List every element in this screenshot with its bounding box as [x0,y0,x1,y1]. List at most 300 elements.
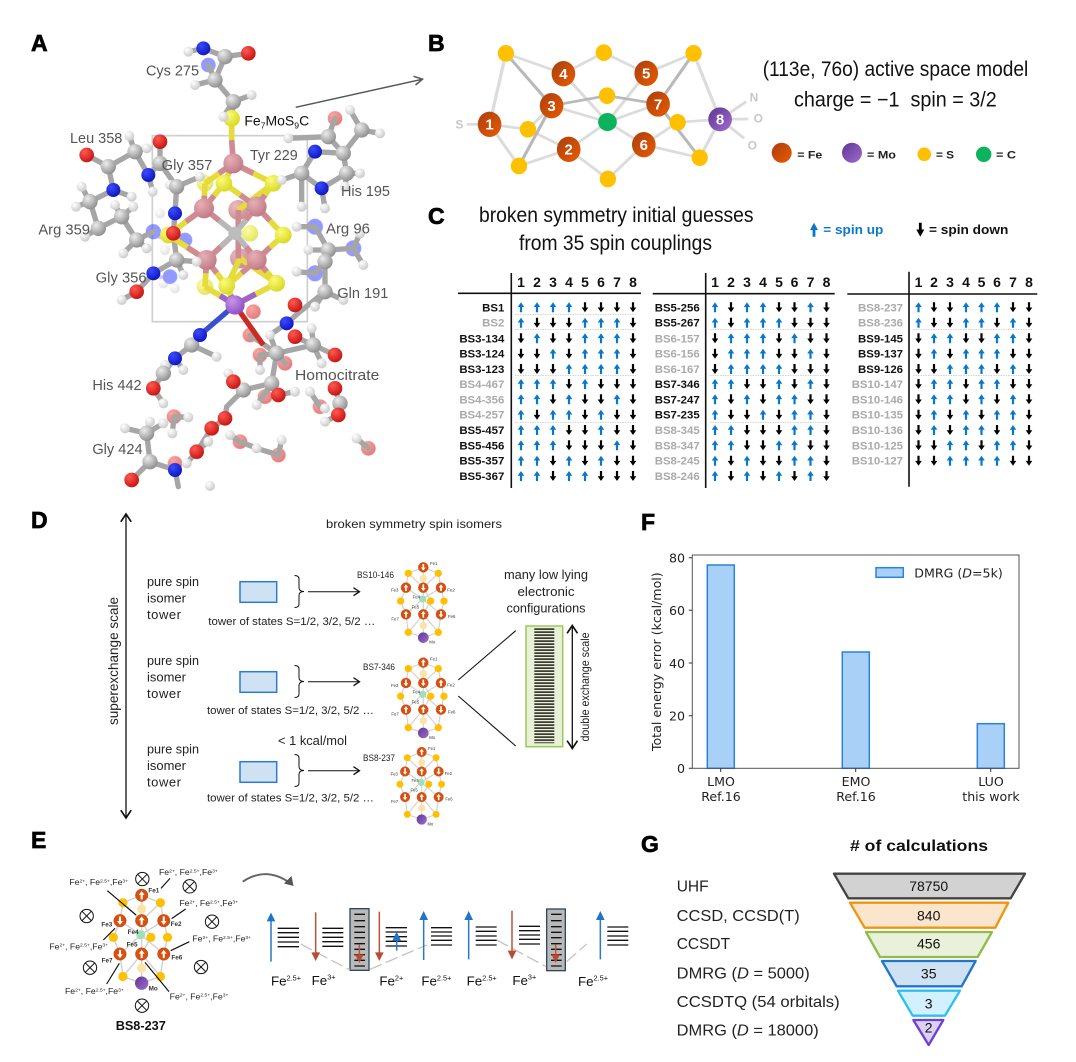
row BS6-157 [655,333,830,345]
cluster BS7-346: Fe1 [430,656,438,661]
cluster BS10-146: Fe2 [447,587,455,592]
tower row 3: tower [147,775,182,790]
row BS4-257 [459,410,636,422]
iron oxidation labels: 2.5+ [437,973,451,982]
method labels: CCSD, CCSD(T) [677,908,800,925]
table heading [479,204,754,255]
atom labels: Fe1 [148,888,160,895]
oxidation state labels: 2.5+ [223,935,233,941]
atom numbers: 8 [716,112,724,129]
cluster BS8-237: Fe3 [391,771,399,776]
spin down arrows [311,911,560,963]
oxidation state labels: 2+ [180,993,186,999]
oxidation state labels: Fe [49,941,59,951]
oxidation state labels: Fe [159,867,169,877]
zoom lines to energy levels [458,631,516,746]
row BS4-356: BS4-356 [459,394,504,406]
table 3 header: 6 [993,274,1001,290]
residue labels: Gly 356 [96,271,147,287]
atom labels: Fe6 [171,954,183,961]
cluster BS10-146: Fe3 [391,588,399,593]
atom legend: = Fe [797,149,822,161]
row BS10-135 [852,410,1032,422]
crossed circles [80,872,219,1012]
y tick labels: 40 [669,656,685,671]
ticks [689,558,991,772]
iron oxidation labels [271,973,608,989]
arrow from cluster to model [296,76,422,107]
oxidation state labels: 3+ [232,899,238,905]
leader lines [103,878,189,992]
x labels: LUO [978,774,1004,789]
funnel counts: 35 [921,965,937,981]
table 3 header: 3 [946,274,954,290]
cluster BS10-146: Fe7 [391,616,399,621]
panel B: active space model [428,30,1028,187]
row BS6-157: BS6-157 [655,333,700,345]
panel letter E: E [31,827,46,853]
cluster label: 9 [294,120,299,130]
iron oxidation labels: Fe [578,974,594,989]
panel letter F: F [641,509,655,535]
table 2 header: 4 [759,274,767,290]
iron oxidation labels: 3+ [528,973,536,982]
residue labels: His 195 [341,184,390,200]
oxidation state labels: 2+ [75,987,81,993]
row BS8-245 [655,456,830,468]
oxidation state labels: 3+ [223,993,229,999]
row BS1 [482,302,636,314]
double exchange label: double exchange scale [578,632,592,742]
label BS10-146: BS10-146 [357,570,394,581]
tower row 1: isomer [147,591,187,606]
row BS5-456: BS5-456 [459,440,504,452]
row BS9-126: BS9-126 [858,364,903,376]
row BS6-156: BS6-156 [655,349,700,361]
atom numbers [485,66,724,159]
double exchange arrow [571,626,573,748]
oxidation state labels: Fe [170,991,180,1001]
oxidation state labels: Fe [179,898,189,908]
iron oxidation labels: Fe [312,973,327,988]
oxidation state labels: ,Fe [200,867,212,877]
oxidation state labels: Fe [65,986,75,996]
table 2 header: 5 [775,274,783,290]
molecular model of cofactor environment [38,41,390,491]
iron oxidation labels: 2.5+ [594,974,608,983]
row BS3-124: BS3-124 [459,349,505,361]
cluster BS7-346: Fe4 [413,690,421,695]
funnel counts: 840 [917,908,941,924]
spin legend: = spin down [929,222,1008,237]
cluster BS10-146: Fe4 [413,594,421,599]
row BS5-457: BS5-457 [459,425,504,437]
row BS10-127 [852,456,1032,468]
row BS10-125: BS10-125 [852,440,904,452]
oxidation state labels: 3+ [212,868,218,874]
oxidation state labels: 2.5+ [80,943,90,949]
iron oxidation labels: Fe [467,974,482,989]
row BS6-156 [655,349,830,361]
oxidation state labels: 2+ [79,878,85,884]
orbital level diagram [267,909,628,989]
oxidation state labels: ,Fe [90,941,103,951]
panel letter D: D [31,507,48,533]
superexchange double arrow [125,514,127,818]
atom labels: Fe7 [102,957,113,964]
row BS5-367 [459,471,636,483]
electronic configurations box [526,626,563,747]
funnel layers [834,874,1025,1045]
oxidation state labels: , Fe [195,898,210,908]
tower row 1: pure spin [147,574,199,589]
row BS10-136 [852,425,1032,437]
heading: broken symmetry spin isomers: broken symmetry spin isomers [326,517,502,531]
row BS5-357: BS5-357 [459,456,504,468]
row BS8-246 [655,471,830,483]
table 3 header: 7 [1009,274,1017,290]
oxidation state labels: 2.5+ [96,987,106,993]
cluster label: Fe [244,113,261,129]
table 1 header: 8 [629,274,637,290]
row BS7-235: BS7-235 [655,410,700,422]
oxidation state labels: ,Fe [233,934,246,944]
row BS10-146: BS10-146 [852,394,903,406]
spin legend [810,222,1008,237]
cluster BS10-146: Mo [429,640,436,645]
method labels: CCSDT [677,936,731,953]
panel G: calculation counts funnel [641,831,1025,1045]
oxidation state labels: Fe [192,934,202,944]
oxidation state labels: Fe [69,877,79,887]
method labels: CCSDTQ (54 orbitals) [677,994,840,1011]
oxidation state labels: , Fe [175,867,190,877]
oxidation state labels: 2.5+ [190,868,200,874]
tower row 2 [147,653,374,717]
table 3 header: 2 [930,274,938,290]
row BS8-237 [858,302,1032,314]
y tick labels: 60 [669,603,685,618]
tower row 3: tower of states S=1/2, 3/2, 5/2 … [207,793,374,805]
cluster BS7-346: Fe2 [447,683,455,688]
table 3 header: 8 [1025,274,1033,290]
row BS5-367: BS5-367 [459,471,504,483]
atom legend: = Mo [867,149,896,161]
iron oxidation labels: 2.5+ [482,973,497,982]
row BS5-267: BS5-267 [655,318,700,330]
residue labels: Arg 359 [38,222,90,238]
row BS5-256: BS5-256 [655,302,700,314]
ligand atoms: O [754,112,763,126]
funnel counts: 456 [917,936,941,952]
many low lying configurations text: many low lying [504,567,588,582]
row BS5-457 [459,425,636,437]
cluster BS8-237: Fe7 [391,799,399,804]
row BS3-134: BS3-134 [459,333,505,345]
x labels: EMO [842,774,870,789]
table 2 header: 2 [727,274,735,290]
y tick labels: 0 [677,761,685,776]
cluster BS7-346: Fe6 [448,709,456,714]
table 2 header: 6 [791,274,799,290]
oxidation state labels: 3+ [118,987,124,993]
spin legend: = spin up [823,222,883,237]
table 3 header: 4 [962,274,970,290]
table 3 header [915,274,1033,290]
row BS7-346 [655,379,830,391]
table 1 header: 4 [565,274,573,290]
row BS8-236 [858,318,1032,330]
row BS7-247: BS7-247 [655,394,700,406]
residue labels: Gln 191 [337,286,388,302]
cluster BS7-346 [391,656,456,740]
row BS10-127: BS10-127 [852,456,903,468]
many low lying configurations text: configurations [506,601,586,616]
row BS9-137 [858,349,1032,361]
oxidation state labels: 2+ [59,943,65,949]
row BS4-257: BS4-257 [459,410,504,422]
y tick labels [669,550,685,776]
atom legend: = C [996,149,1016,161]
row BS5-456 [459,440,636,452]
cluster BS8-237: Mo [427,821,434,826]
cluster BS7-346: Fe7 [391,712,399,717]
panel C: broken symmetry table [428,203,1037,488]
iron oxidation labels: Fe [379,974,395,989]
legend: DMRG (D=5k) [914,565,1003,580]
row BS4-467 [459,379,636,391]
panel letter G: G [641,831,659,857]
curved arrow [243,874,294,886]
atom labels: Fe5 [127,942,138,949]
row BS7-235 [655,410,830,422]
cluster BS8-237: Fe2 [445,771,453,776]
row BS10-125 [852,440,1032,452]
funnel counts: 78750 [909,878,948,894]
y tick labels: 80 [669,550,685,566]
ligand atoms [455,90,763,152]
row BS5-357 [459,456,636,468]
panel E: local charge fluctuations [31,827,628,1033]
panel A: protein structure [31,30,422,491]
table heading: from 35 spin couplings [519,232,712,255]
atom numbers: 7 [654,96,662,113]
tower row 2: tower of states S=1/2, 3/2, 5/2 … [207,705,374,717]
oxidation state labels [49,867,251,1001]
row BS4-356 [459,394,636,406]
row BS8-345: BS8-345 [655,425,700,437]
label BS7-346: BS7-346 [363,662,395,673]
row BS8-237: BS8-237 [858,302,903,314]
superexchange label: superexchange scale [105,597,121,725]
cluster BS8-237 [391,746,453,826]
row BS8-347 [655,440,830,452]
residue labels [38,64,390,458]
atom legend: = S [936,149,954,161]
atom labels: Fe4 [128,929,139,936]
cluster BS10-146 [391,561,456,645]
oxidation state labels: ,Fe [110,877,123,887]
atom legend [772,143,1016,163]
tower row 3 [147,741,374,805]
y tick labels: 20 [669,708,685,724]
oxidation state labels: , Fe [65,941,80,951]
tower row 2: tower [147,686,182,701]
table 1 header: 6 [597,274,605,290]
tower row 1: tower [147,607,182,622]
energy gap label: < 1 kcal/mol [278,733,347,748]
row BS10-146 [852,394,1032,406]
tower row 2: pure spin [147,653,199,668]
tower row 3: pure spin [147,741,199,756]
cluster schematic [467,44,748,187]
atom numbers: 3 [547,98,556,115]
table 1 header: 5 [581,274,589,290]
row BS7-247 [655,394,830,406]
ligand atoms: N [750,90,758,104]
oxidation state labels: , Fe [85,877,100,887]
cluster BS10-146: Fe1 [430,561,438,566]
row BS9-137: BS9-137 [858,349,903,361]
cluster BS10-146: Fe5 [412,604,420,609]
atom labels: Fe3 [101,922,113,929]
cluster BS7-346: Fe5 [412,700,420,705]
oxidation state labels: , Fe [81,986,96,996]
residue labels: Homocitrate [295,368,379,384]
row BS10-147: BS10-147 [852,379,903,391]
atom numbers: 4 [559,66,568,83]
cluster label: C [299,113,309,129]
residue labels: Gly 424 [92,442,143,458]
residue labels: Leu 358 [70,131,122,147]
oxidation state labels: , Fe [208,934,223,944]
oxidation state labels: 3+ [102,943,108,949]
row BS1: BS1 [482,302,505,314]
cluster BS7-346: Mo [429,735,436,740]
oxidation state labels: , Fe [185,991,201,1001]
cluster BS10-146: Fe6 [448,614,456,619]
row BS3-124 [459,349,636,361]
oxidation state labels: 2.5+ [100,878,110,884]
oxidation state labels: 3+ [245,935,251,941]
charge and spin: charge = −1 spin = 3/2 [794,89,997,112]
atom numbers: 6 [640,137,648,154]
row BS9-126 [858,364,1032,376]
tower row 1 [147,574,375,628]
table 1 header: 7 [613,274,621,290]
row BS10-147 [852,379,1032,391]
table 3 header: 5 [978,274,986,290]
funnel title: # of calculations [850,838,988,855]
cluster BS8-237 with oxidation states [49,867,251,1012]
iron oxidation labels: 2+ [395,973,403,982]
row BS8-345 [655,425,830,437]
row BS2: BS2 [482,318,504,330]
residue labels: His 442 [92,378,142,394]
row BS5-256 [655,302,830,314]
row BS8-347: BS8-347 [655,440,700,452]
x labels: this work [962,789,1020,804]
table 1 header: 3 [549,274,557,290]
row BS5-267 [655,318,830,330]
table 2 header: 7 [807,274,815,290]
atom labels: Mo [149,986,158,993]
panel letter B: B [428,30,445,56]
method labels [677,879,840,1040]
row BS9-145: BS9-145 [858,333,904,345]
axes frame [692,555,1019,768]
table 1 header: 2 [533,274,541,290]
table 1 header: 1 [517,274,525,290]
funnel counts: 3 [925,995,933,1011]
method labels: DMRG (D = 5000) [677,965,810,982]
atom labels: Fe2 [171,921,182,928]
row BS6-167: BS6-167 [655,364,700,376]
panel D: energy scales [31,507,592,826]
table 1 header [517,274,637,290]
row BS3-123: BS3-123 [459,364,504,376]
atom numbers: 1 [485,117,494,134]
row BS3-123 [459,364,636,376]
row BS10-136: BS10-136 [852,425,903,437]
cluster label: 7 [261,120,266,130]
table 1 [458,273,641,488]
method labels: DMRG (D = 18000) [677,1023,819,1040]
table 2 header [711,274,831,290]
model description: (113e, 76o) active space model [763,58,1028,81]
legend [876,565,1003,580]
ligand atoms: O [748,138,757,152]
bars [707,565,1004,768]
cluster BS8-237: Fe4 [411,778,419,783]
iron oxidation labels: 2.5+ [287,973,301,982]
oxidation state labels: 2+ [169,868,175,874]
row BS3-134 [459,333,636,345]
table 2 header: 1 [711,274,719,290]
method labels: UHF [677,879,709,896]
highlighted orbital boxes [350,909,565,971]
tower row 2: isomer [147,670,187,685]
panel F: bar chart [641,509,1020,804]
tower row 1: tower of states S=1/2, 3/2, 5/2 … [208,616,375,628]
y axis label: Total energy error (kcal/mol) [649,572,664,752]
oxidation state labels: ,Fe [220,898,233,908]
oxidation state labels: 2+ [202,935,208,941]
panel letter A: A [31,30,48,56]
many low lying configurations text: electronic [518,584,575,599]
ligand atoms: S [455,118,463,132]
table 2 [653,273,835,488]
atom numbers: 5 [642,66,650,83]
cluster name: BS8-237 [116,1019,166,1033]
table 2 header: 3 [743,274,751,290]
residue labels: Gly 357 [162,158,212,174]
cluster BS8-237: Fe6 [445,797,453,802]
residue labels: Tyr 229 [250,148,298,164]
row BS4-467: BS4-467 [459,379,504,391]
oxidation state labels: 2.5+ [210,899,220,905]
iron oxidation labels: Fe [271,974,287,989]
x labels: Ref.16 [836,789,876,804]
panel letter C: C [428,203,445,229]
oxidation state labels: ,Fe [210,991,223,1001]
many low lying configurations text [504,567,588,616]
x labels: Ref.16 [701,789,741,804]
iron oxidation labels: Fe [421,974,437,989]
table 2 header: 8 [823,274,831,290]
funnel counts [909,878,948,1036]
row BS2 [482,318,636,330]
